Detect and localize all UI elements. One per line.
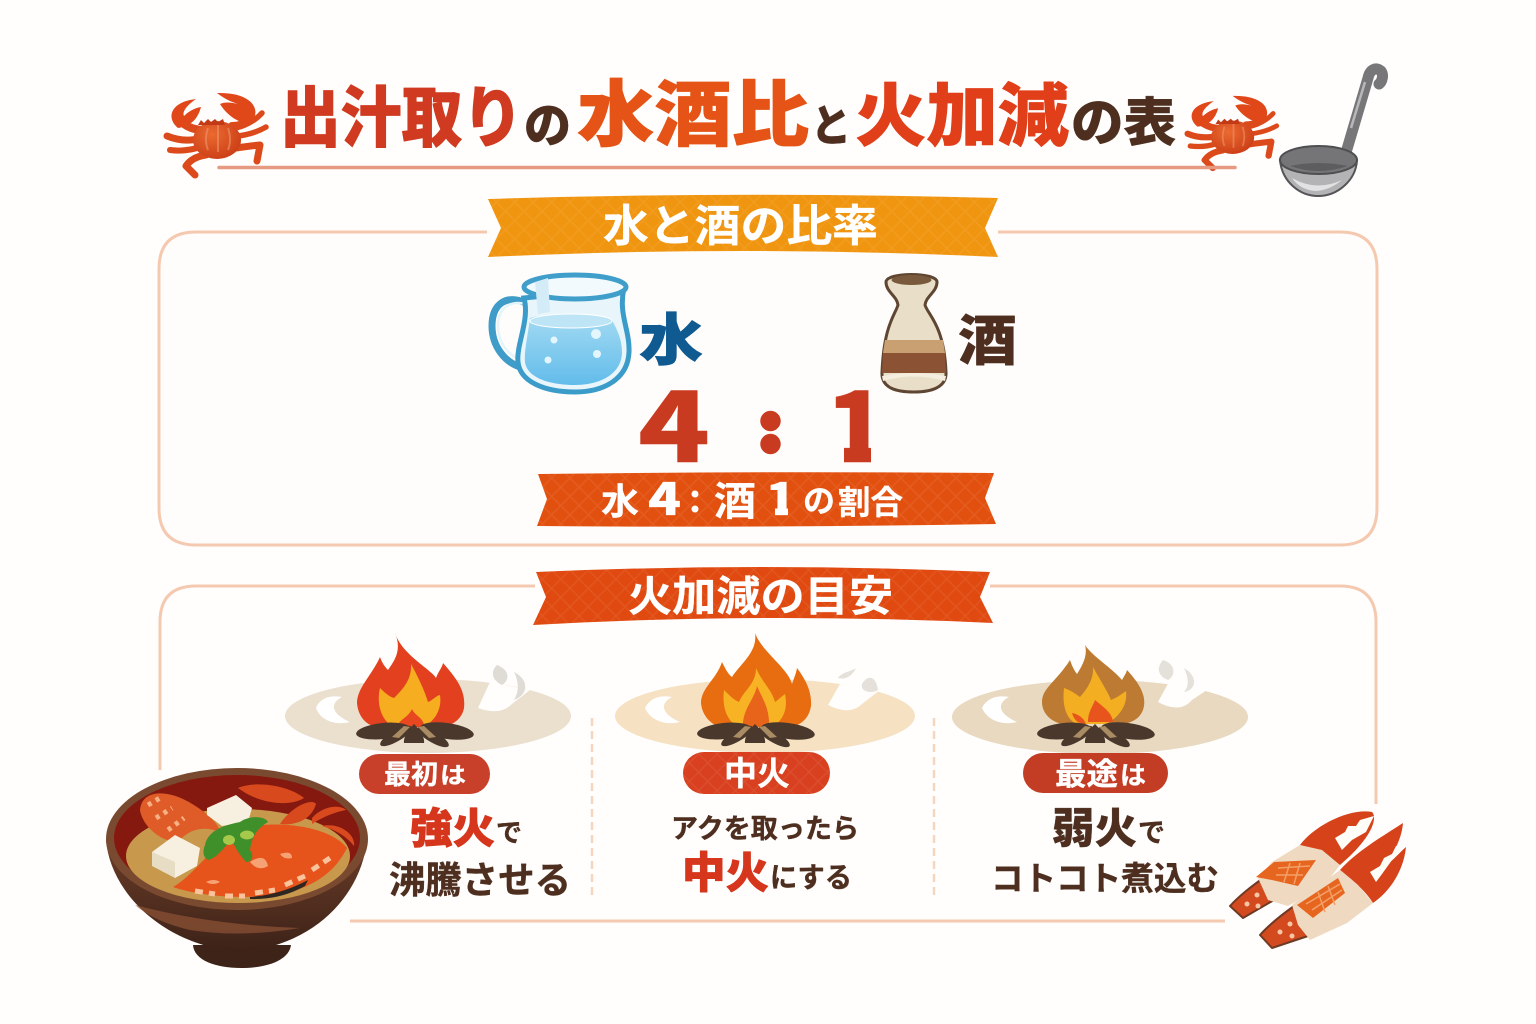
text: low heat instruction: 弱火 bbox=[1052, 805, 1137, 852]
ratio caption ribbon: 酒 bbox=[714, 480, 756, 524]
lower claw bbox=[1260, 823, 1406, 948]
text: medium heat instruction: アクを取ったら bbox=[671, 814, 859, 844]
text: low heat instruction bbox=[991, 805, 1219, 897]
text: strong heat instruction: で bbox=[496, 818, 522, 848]
text: strong heat instruction bbox=[389, 805, 571, 901]
title text: の: の bbox=[524, 100, 571, 153]
ratio caption ribbon: 4 bbox=[648, 464, 681, 528]
ratio caption ribbon: 1 bbox=[766, 464, 796, 528]
icon: sake bottle bbox=[882, 274, 946, 392]
heading banner: ratio: 水と酒の比率 bbox=[603, 202, 878, 251]
ratio caption ribbon: 水 bbox=[601, 481, 639, 522]
icon: left crab bbox=[167, 93, 266, 175]
pill: finally: は bbox=[1120, 762, 1146, 790]
title underline bbox=[219, 166, 1235, 169]
panel: heat guide bbox=[160, 567, 1376, 921]
pill: medium heat: 中火 bbox=[724, 755, 790, 792]
column: low heat bbox=[952, 645, 1248, 897]
text: low heat instruction: で bbox=[1138, 818, 1165, 848]
panel outline bbox=[160, 586, 1376, 921]
icon: right crab bbox=[1188, 96, 1277, 168]
column: strong heat bbox=[285, 633, 571, 901]
text: strong heat instruction: 沸騰させる bbox=[389, 860, 571, 901]
text: medium heat instruction: 中火 bbox=[682, 850, 769, 898]
upper claw bbox=[1230, 811, 1374, 918]
ratio caption ribbon bbox=[537, 472, 996, 527]
infographic canvas bbox=[106, 63, 1406, 968]
pill: at first bbox=[359, 754, 490, 794]
title text: 火加減: 火加減 bbox=[855, 78, 1069, 155]
illustration: crab claws bbox=[1230, 811, 1406, 948]
pill: medium heat bbox=[683, 752, 830, 794]
ratio caption ribbon: の bbox=[803, 483, 835, 519]
pill: at first: は bbox=[440, 762, 466, 788]
heading banner: heat bbox=[533, 567, 993, 625]
dividers bbox=[592, 718, 934, 899]
icon: water jug bbox=[492, 275, 629, 392]
title text: の表: の表 bbox=[1071, 95, 1176, 153]
icon: low flame bbox=[952, 645, 1248, 754]
heading banner: ratio bbox=[488, 195, 998, 257]
text: low heat instruction: コトコト煮込む bbox=[991, 860, 1219, 897]
ratio number: 4 : 1: 1 bbox=[826, 351, 888, 490]
title text: 水酒比: 水酒比 bbox=[577, 76, 809, 156]
text: strong heat instruction: 強火 bbox=[410, 805, 495, 852]
icon: medium flame bbox=[615, 633, 915, 753]
label: sake: 酒 bbox=[958, 310, 1017, 372]
heading banner: heat: 火加減の目安 bbox=[628, 573, 893, 620]
title bbox=[167, 76, 1277, 175]
ratio number: 4 : 1: 4 bbox=[638, 351, 710, 490]
panel: water and sake ratio bbox=[159, 195, 1377, 545]
illustration: crab soup bowl bbox=[106, 768, 368, 968]
label: water: 水 bbox=[639, 309, 703, 372]
ratio number: 4 : 1 bbox=[640, 390, 871, 462]
pill: at first: 最初 bbox=[384, 760, 438, 790]
title text: 出汁取り: 出汁取り bbox=[280, 81, 523, 155]
text: medium heat instruction bbox=[671, 814, 859, 898]
icon: ladle bbox=[1280, 69, 1382, 196]
pill: finally bbox=[1023, 753, 1168, 793]
pill: finally: 最途 bbox=[1055, 757, 1118, 792]
panel outline bbox=[159, 232, 1377, 545]
icon: strong flame bbox=[285, 633, 571, 753]
text: medium heat instruction: にする bbox=[770, 862, 852, 893]
title text: と: と bbox=[811, 102, 851, 151]
column: medium heat bbox=[615, 633, 915, 898]
ratio caption ribbon: 割合 bbox=[838, 484, 903, 521]
